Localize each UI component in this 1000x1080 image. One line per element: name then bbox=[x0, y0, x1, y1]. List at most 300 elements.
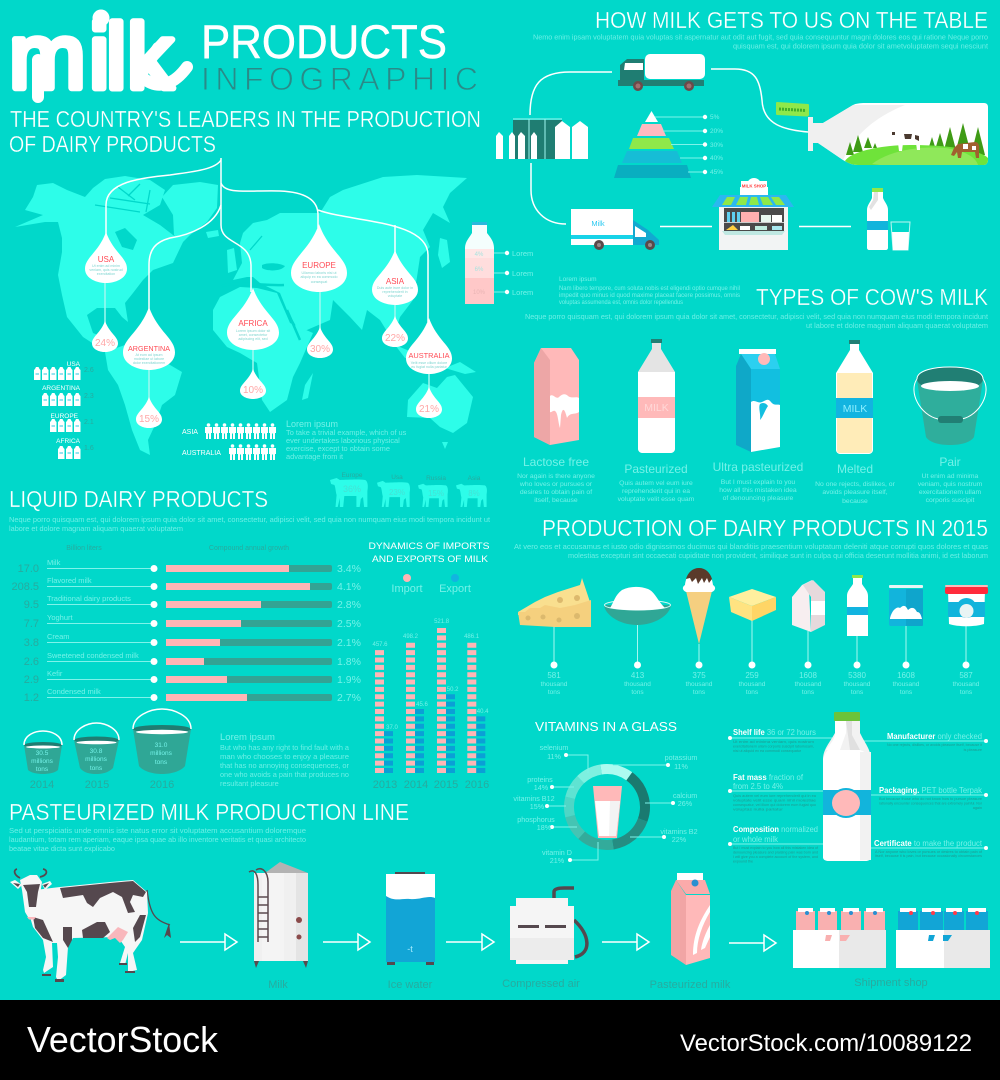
bottle callouts right bbox=[860, 732, 988, 858]
product: butter: thousand bbox=[739, 681, 766, 688]
milk type: pasteurized: voluptate velit esse quam bbox=[618, 496, 695, 503]
product: cottage cheese bowl bbox=[604, 587, 671, 696]
row: milk bbox=[18, 558, 361, 575]
drop: Asia share: 22% bbox=[385, 333, 405, 344]
stacked chart: imports and exports bbox=[368, 541, 490, 791]
milk type: lactose free: who loves or pursues or bbox=[519, 481, 593, 488]
callout: fat mass: consequatur, vel illum qui dolorem eum fugiat quo bbox=[733, 803, 816, 807]
vitamin callouts: phosphorus bbox=[517, 815, 555, 824]
text block: supply chain lorem ipsum bbox=[559, 276, 740, 306]
vitamin callouts bbox=[513, 743, 698, 865]
row: condensed milk bbox=[24, 687, 361, 704]
drop: Africa: Lorem ipsum dolor sit bbox=[236, 329, 270, 333]
callout: composition: denouncing pleasure and praising pain was born and bbox=[733, 850, 818, 854]
icon: glass of milk bbox=[593, 786, 622, 838]
product: cheese: tons bbox=[548, 689, 561, 696]
cow silhouettes chart: 36% bbox=[343, 484, 361, 494]
logo: milk lettering: milk bbox=[9, 6, 174, 108]
drop: Asia share bbox=[382, 316, 408, 347]
heading: country leaders: THE COUNTRY'S LEADERS IN THE PRODUCTION bbox=[10, 106, 481, 132]
drop: Europe: Ullamco laboris nisi ut bbox=[302, 271, 336, 275]
callout: composition: I will give you a complete account of the system, and bbox=[733, 855, 818, 859]
text block: liquid products lorem ipsum: man who chooses to enjoy a pleasure bbox=[220, 752, 349, 761]
icon: bottle with pasture scene bbox=[776, 102, 988, 165]
callout: shelf life: Ut enim ad minima veniam, quis nostrum bbox=[733, 740, 814, 744]
milk type: pasteurized: reprehenderit qui in ea bbox=[622, 488, 690, 495]
vitamin callouts: 15% bbox=[530, 802, 545, 811]
drop: Europe: aliquip ex ea commodo bbox=[301, 275, 337, 279]
supply chain connector lines bbox=[530, 69, 851, 226]
drop: Asia bbox=[372, 250, 418, 305]
title: products: PRODUCTS bbox=[201, 15, 447, 68]
pail: 2015: tons bbox=[90, 765, 103, 772]
callout: composition: Composition normalized bbox=[733, 825, 818, 834]
milk type: ultra pasteurized: Ultra pasteurized bbox=[713, 460, 803, 474]
callout: certificate: A Nor anyone who loves or pursues or desires to obtain pain of bbox=[875, 850, 983, 854]
milk type: pasteurized bbox=[618, 339, 695, 503]
product: yogurt cup: thousand bbox=[953, 681, 980, 688]
callout: certificate: Certificate to make the product bbox=[874, 839, 983, 848]
footer bar: VectorStock bbox=[27, 1019, 219, 1060]
text block: liquid products lorem ipsum: resultant pleasure bbox=[220, 779, 279, 788]
heading: pasteurized milk production line: beatae vitae dicta sunt explicabo bbox=[9, 844, 115, 853]
milk type: lactose free: itself, because bbox=[534, 497, 578, 504]
bar values: 45.6 bbox=[416, 702, 428, 708]
milk type: pail: Ut enim ad minima bbox=[922, 473, 979, 480]
vitamin callouts: 18% bbox=[537, 823, 552, 832]
icon: dairy factory bbox=[496, 119, 588, 159]
pail: 2015: 30.8 bbox=[90, 748, 103, 755]
milk type: melted: Melted bbox=[837, 462, 873, 476]
product: cheese: thousand bbox=[541, 681, 568, 688]
row: flavored milk bbox=[11, 576, 361, 593]
icon: ice water tank: -t bbox=[407, 944, 413, 954]
product: white carton: tons bbox=[802, 689, 815, 696]
product: blue cup: 1608 bbox=[897, 671, 915, 680]
milk type: pail: exercitationem ullam bbox=[919, 489, 981, 496]
heading: country leaders: OF DAIRY PRODUCTS bbox=[9, 131, 216, 157]
milk type: pail: veniam, quis nostrum bbox=[918, 481, 983, 488]
cow silhouettes chart: 23% bbox=[389, 488, 405, 497]
product: cottage cheese bowl: thousand bbox=[624, 681, 651, 688]
icon: ice water tank bbox=[386, 872, 435, 991]
milk type: lactose free: Nor again is there anyone bbox=[517, 473, 595, 480]
callout: fat mass: Fat mass fraction of bbox=[733, 773, 804, 782]
drop: Argentina: ARGENTINA bbox=[128, 344, 171, 353]
text block: supply chain lorem ipsum: Lorem ipsum bbox=[559, 276, 597, 283]
heading: types of cow's milk bbox=[525, 284, 989, 330]
bottle pictogram chart: ARGENTINA bbox=[42, 385, 81, 392]
milk type: pasteurized: Pasteurized bbox=[624, 462, 688, 476]
row: yoghurt bbox=[24, 613, 361, 630]
row: traditional dairy products: 2.8% bbox=[337, 599, 361, 611]
milk type: pasteurized: MILK bbox=[644, 402, 669, 414]
icon: milk shop: MILK SHOP bbox=[742, 184, 766, 188]
callout: shelf life: exercitationem ullam corporis suscipit laboriosam, bbox=[733, 744, 814, 748]
text block: liquid products lorem ipsum: But who has any right to find fault with a bbox=[220, 743, 350, 752]
callout: composition bbox=[728, 825, 823, 864]
product: blue cup: tons bbox=[900, 689, 913, 696]
drop: Australia: AUSTRALIA bbox=[408, 351, 450, 360]
sea channels bbox=[95, 184, 262, 250]
milk type: melted: avoids pleasure itself, bbox=[822, 489, 888, 496]
callout: packaging bbox=[871, 786, 988, 810]
pail: 2014: millions bbox=[31, 758, 54, 765]
bars bbox=[380, 626, 481, 773]
product: bottle: thousand bbox=[844, 681, 871, 688]
callout: packaging: again bbox=[973, 806, 982, 810]
arrow 4 bbox=[602, 934, 649, 950]
callout: packaging: But because those who do not know how to pursue pleasure bbox=[879, 797, 982, 801]
icon: air compressor bbox=[502, 888, 587, 990]
pyramid chart: 5% bbox=[710, 114, 720, 121]
milk type: pail bbox=[914, 367, 986, 504]
product: ice cream: thousand bbox=[686, 681, 713, 688]
bar values: 521.8 bbox=[434, 619, 450, 625]
heading: production of dairy products in 2015 bbox=[514, 515, 988, 560]
icon: silo bbox=[249, 862, 308, 991]
drop: Argentina: molestiae ut labore bbox=[134, 357, 164, 361]
product: cottage cheese bowl: 413 bbox=[631, 671, 645, 680]
icon: blue milk crate: Shipment shop bbox=[854, 977, 928, 989]
product: blue cup: thousand bbox=[893, 681, 920, 688]
row: yoghurt: Yoghurt bbox=[47, 613, 73, 622]
row: yoghurt: 7.7 bbox=[24, 618, 39, 630]
text block: map lorem ipsum bbox=[286, 419, 407, 461]
pail: 2014: tons bbox=[36, 766, 49, 773]
callout: certificate: itself, because it is pain, but because occasionally circumstances bbox=[875, 854, 982, 858]
drop: Africa: adipiscing elit, sed bbox=[238, 337, 268, 341]
row: traditional dairy products: 9.5 bbox=[24, 599, 39, 611]
icon: silo: Milk bbox=[268, 979, 288, 991]
milk type: ultra pasteurized: But I must explain to you bbox=[721, 479, 795, 486]
product: butter bbox=[729, 589, 776, 696]
subtitle: infographic: INFOGRAPHIC bbox=[201, 61, 478, 97]
bar values: 37.0 bbox=[386, 725, 398, 731]
cow silhouettes chart: 15% bbox=[428, 489, 444, 498]
icon: pink milk crate bbox=[793, 908, 886, 968]
drop: USA: exercitation bbox=[97, 272, 115, 276]
drop: Asia: Duis aute irure dolor in bbox=[377, 286, 413, 290]
bar chart: liquid dairy products bbox=[11, 545, 361, 704]
product: white carton bbox=[792, 580, 825, 696]
vitamin callouts: calcium bbox=[673, 791, 697, 800]
drop: Argentina share bbox=[136, 397, 162, 428]
bar values: 40.4 bbox=[477, 709, 489, 715]
pail: 2015: millions bbox=[85, 756, 108, 763]
vitamin callouts: 11% bbox=[547, 752, 562, 761]
drop: Africa: AFRICA bbox=[238, 319, 268, 328]
heading: pasteurized milk production line bbox=[9, 799, 409, 853]
row: cream bbox=[24, 632, 361, 649]
product: bottle bbox=[844, 575, 871, 696]
pyramid chart: 40% bbox=[710, 155, 723, 162]
bottle pictogram chart: USA bbox=[67, 361, 81, 368]
text block: liquid products lorem ipsum: Lorem ipsum bbox=[220, 732, 275, 743]
bar chart: liquid dairy products: Billion liters bbox=[66, 545, 102, 552]
labelled product bottle bbox=[823, 712, 871, 861]
donut chart: vitamins bbox=[569, 769, 645, 845]
milk bottle fat chart bbox=[465, 222, 533, 304]
heading: how milk gets to us: quisquam est, qui dolorem ipsum quia dolor sit ametvoluptatem sequi nesciunt bbox=[733, 42, 988, 50]
vitamin callouts: 26% bbox=[678, 799, 693, 808]
drop: Australia: Velit esse cillum dolore bbox=[411, 361, 447, 365]
heading: liquid dairy products: Neque porro quisquam est, qui dolorem ipsum quia dolor sit amet, consectetur, adipisci velit, sed quia non numquam eius modi tempora incidunt ut bbox=[9, 515, 490, 524]
row: sweetened condensed milk: 1.8% bbox=[337, 656, 361, 668]
inland seas bbox=[262, 263, 303, 286]
vitamin callouts: vitamins B2 bbox=[660, 827, 698, 836]
year labels: 2015 bbox=[434, 779, 458, 791]
bottle pictogram chart: 2.1 bbox=[84, 419, 94, 426]
milk type: ultra pasteurized: how all this mistaken idea bbox=[719, 487, 797, 494]
callout: fat mass: Quis autem vel eum iure reprehenderit qui in ea bbox=[733, 794, 817, 798]
drop: Australia share bbox=[416, 387, 442, 418]
pyramid chart: 30% bbox=[710, 142, 723, 149]
milk type: lactose free: desires to obtain pain of bbox=[520, 489, 592, 496]
callout: manufacturer: is pleasure bbox=[964, 748, 982, 752]
milk bottle fat chart: 6% bbox=[475, 267, 484, 273]
icon: delivery van: Milk bbox=[591, 219, 605, 228]
arrow 2 bbox=[323, 934, 370, 950]
year labels: 2014 bbox=[404, 779, 428, 791]
milk type: melted: MILK bbox=[843, 403, 867, 415]
callout: fat mass: voluptate velit esse quam nihil molestiae bbox=[733, 798, 816, 802]
pail: 2016: 31.0 bbox=[155, 742, 168, 749]
heading: vitamins in a glass: VITAMINS IN A GLASS bbox=[535, 720, 677, 734]
pail: 2016: tons bbox=[155, 759, 168, 766]
legend: Export bbox=[439, 583, 471, 595]
drop: USA share bbox=[92, 321, 118, 352]
icon: blue milk crate bbox=[854, 908, 990, 989]
row: kefir: 1.9% bbox=[337, 674, 361, 686]
bar chart: liquid dairy products: Compound annual growth bbox=[209, 545, 289, 552]
callout: fat mass: voluptas nulla pariatur bbox=[733, 808, 784, 812]
icon: milk tanker truck bbox=[618, 54, 705, 91]
row: flavored milk: 208.5 bbox=[11, 581, 39, 593]
milk bottle fat chart: 10% bbox=[473, 290, 486, 296]
product: white carton: 1608 bbox=[799, 671, 817, 680]
milk type: pail: corporis suscipit bbox=[926, 497, 974, 504]
text block: liquid products lorem ipsum bbox=[220, 732, 350, 788]
row: sweetened condensed milk: 2.6 bbox=[24, 656, 39, 668]
people pictogram chart bbox=[182, 423, 276, 460]
heading: liquid dairy products: LIQUID DAIRY PRODUCTS bbox=[9, 486, 268, 512]
callout: composition: or whole milk bbox=[733, 835, 779, 844]
row: kefir bbox=[24, 669, 361, 686]
bar values: 457.6 bbox=[372, 642, 388, 648]
icon: pasteurized milk carton: Pasteurized milk bbox=[650, 979, 731, 991]
drop: Argentina share: 15% bbox=[139, 414, 159, 425]
bar values: 486.1 bbox=[464, 634, 480, 640]
pail: 2016 bbox=[133, 709, 191, 791]
row: milk: 17.0 bbox=[18, 563, 39, 575]
icon: bottle and glass bbox=[867, 188, 910, 250]
heading: liquid dairy products: labore et dolore magnam aliquam quaerat voluptatem bbox=[9, 524, 183, 533]
heading: pasteurized milk production line: Sed ut perspiciatis unde omnis iste natus error sit voluptatem accusantium doloremque bbox=[9, 826, 306, 835]
drop: Europe share: 30% bbox=[310, 344, 330, 355]
callout: shelf life bbox=[728, 728, 835, 753]
milk bottle fat chart: Lorem bbox=[512, 269, 533, 278]
callout: shelf life: nisi ut aliquid ex ea commodi consequatur bbox=[733, 749, 802, 753]
callout: composition: expound the bbox=[733, 860, 753, 864]
title block bbox=[9, 6, 478, 108]
year labels: 2016 bbox=[465, 779, 489, 791]
chart title bbox=[368, 541, 490, 565]
milk bottle fat chart: Lorem bbox=[512, 249, 533, 258]
drop: Africa share bbox=[240, 369, 266, 399]
vitamin callouts: selenium bbox=[540, 743, 568, 752]
cow silhouettes chart: Europe bbox=[342, 472, 363, 479]
drop: Argentina: dolor exercitationem bbox=[133, 361, 165, 365]
callout: fat mass: from 2.5 to 4% bbox=[733, 782, 783, 791]
product: yogurt cup: 587 bbox=[959, 671, 973, 680]
vitamin callouts: potassium bbox=[665, 753, 697, 762]
bar values bbox=[372, 619, 489, 731]
vitamin callouts: 14% bbox=[534, 783, 549, 792]
text block: map lorem ipsum: ever undertakes laborious physical bbox=[286, 436, 400, 445]
drop: Argentina: At eum ad ipsum bbox=[136, 353, 162, 357]
milk type: ultra pasteurized bbox=[713, 349, 803, 502]
heading: pasteurized milk production line: PASTEURIZED MILK PRODUCTION LINE bbox=[9, 799, 409, 825]
heading: production of dairy products in 2015: At vero eos et accusamus et iusto odio dignissimos ducimus qui blanditiis praesentium voluptatum deleniti atque corrupti quos dolores et quas bbox=[514, 542, 988, 551]
product: blue cup bbox=[889, 585, 923, 696]
stems and dots for production bbox=[550, 620, 970, 668]
icon: delivery van bbox=[571, 209, 659, 250]
product: white carton: thousand bbox=[795, 681, 822, 688]
drop: Argentina bbox=[123, 307, 175, 370]
drop: Australia: eu fugiat nulla pariatur bbox=[411, 365, 448, 369]
icon: milk shop bbox=[712, 178, 794, 250]
row: condensed milk: 1.2 bbox=[24, 692, 39, 704]
connector lines bbox=[105, 158, 429, 400]
drop: Asia: ASIA bbox=[386, 277, 405, 286]
chart title: DYNAMICS OF IMPORTS bbox=[368, 541, 490, 552]
product: yogurt cup: tons bbox=[960, 689, 973, 696]
icon: ice water tank: Ice water bbox=[388, 979, 433, 991]
milk type: melted: No one rejects, dislikes, or bbox=[815, 481, 896, 488]
milk type: melted bbox=[815, 340, 896, 505]
drop: Australia bbox=[406, 318, 452, 374]
callout: composition: But I must explain to you how all this mistaken idea of bbox=[733, 846, 819, 850]
drop: Asia: voluptate bbox=[388, 294, 402, 298]
product: ice cream: 375 bbox=[692, 671, 706, 680]
world map bbox=[15, 175, 476, 455]
drop: Australia share: 21% bbox=[419, 404, 439, 415]
drop: Africa: amet, consectetur bbox=[239, 333, 268, 337]
arrow 5 bbox=[729, 935, 776, 951]
pyramid chart bbox=[614, 111, 723, 178]
pail: 2014: 30.5 bbox=[36, 750, 49, 757]
cow silhouettes chart bbox=[330, 472, 487, 507]
drop: Africa bbox=[227, 288, 279, 350]
vitamin callouts: vitamin D bbox=[542, 848, 572, 857]
chart title: AND EXPORTS OF MILK bbox=[372, 554, 489, 565]
heading: pasteurized milk production line: laudantium, totam rem aperiam, eaque ipsa quae ab illo inventore veritatis et quasi architecto bbox=[9, 835, 306, 844]
heading: liquid dairy products bbox=[9, 486, 490, 533]
bottle pictogram chart: 2.6 bbox=[84, 367, 94, 374]
legend bbox=[391, 574, 471, 595]
drop: Asia: reprehenderit in bbox=[382, 290, 408, 294]
drop: Europe share bbox=[307, 327, 333, 358]
row: condensed milk: 2.7% bbox=[337, 692, 361, 704]
drop: Europe: EUROPE bbox=[302, 261, 336, 270]
row: sweetened condensed milk: Sweetened condensed milk bbox=[47, 651, 139, 660]
product: ice cream bbox=[683, 568, 715, 696]
drop: Europe: consequat bbox=[311, 280, 327, 284]
callout: manufacturer: No one rejects, dislikes, or avoids pleasure itself, because it bbox=[887, 743, 983, 747]
icon: cow bbox=[10, 869, 171, 982]
year labels: 2013 bbox=[373, 779, 397, 791]
cow silhouettes chart: Asia bbox=[468, 475, 481, 482]
heading: types of cow's milk: ut labore et dolore magnam aliquam quaerat voluptatem bbox=[806, 321, 988, 330]
row: cream: Cream bbox=[47, 632, 70, 641]
vitamin callouts: 22% bbox=[672, 835, 687, 844]
row: kefir: Kefir bbox=[47, 669, 63, 678]
vitamin callouts: proteins bbox=[527, 775, 553, 784]
pyramid chart: 45% bbox=[710, 169, 723, 176]
product: cheese: 581 bbox=[547, 671, 561, 680]
row: condensed milk: Condensed milk bbox=[47, 687, 101, 696]
legend: Import bbox=[391, 583, 423, 595]
product: cheese bbox=[518, 578, 591, 696]
bottle pictogram chart: AFRICA bbox=[56, 438, 81, 445]
row: traditional dairy products: Traditional dairy products bbox=[47, 594, 131, 603]
drop: USA: USA bbox=[98, 255, 115, 264]
callout: fat mass bbox=[728, 773, 823, 812]
text block: supply chain lorem ipsum: Nam libero tempore, cum soluta nobis est eligendi optio cumque nihil bbox=[559, 285, 740, 292]
heading: how milk gets to us bbox=[533, 7, 988, 50]
bottle pictogram chart bbox=[34, 361, 94, 459]
text block: supply chain lorem ipsum: voluptas assumenda est, omnis dolor repellendus bbox=[559, 299, 683, 306]
milk type: lactose free bbox=[517, 348, 595, 504]
product: bottle: 5380 bbox=[848, 671, 866, 680]
product: yogurt cup bbox=[945, 585, 988, 696]
footer bar bbox=[0, 1000, 1000, 1080]
cow silhouettes chart: 8% bbox=[468, 489, 480, 498]
icon: air compressor: Compressed air bbox=[502, 978, 580, 990]
row: sweetened condensed milk bbox=[24, 651, 361, 668]
Hudson Bay bbox=[115, 228, 137, 250]
bottle callouts left bbox=[728, 728, 835, 864]
vitamin callouts: 21% bbox=[550, 856, 565, 865]
callout: manufacturer: Manufacturer only checked bbox=[887, 732, 982, 741]
heading: country leaders bbox=[9, 106, 481, 157]
bottle pictogram chart: EUROPE bbox=[51, 413, 79, 420]
pail: 2014 bbox=[24, 731, 62, 791]
row: cream: 2.1% bbox=[337, 637, 361, 649]
footer bar: VectorStock.com/10089122 bbox=[680, 1030, 972, 1057]
milk type: melted: because bbox=[842, 498, 868, 505]
people pictogram chart: ASIA bbox=[182, 429, 198, 436]
pyramid chart: 20% bbox=[710, 128, 723, 135]
product: butter: tons bbox=[746, 689, 759, 696]
product: butter: 259 bbox=[745, 671, 759, 680]
vitamin callouts: 11% bbox=[674, 762, 689, 771]
row: milk: 3.4% bbox=[337, 563, 361, 575]
milk type: ultra pasteurized: of denouncing pleasure bbox=[723, 495, 794, 502]
drop: USA: Ut enim ad minim bbox=[92, 264, 120, 268]
bar values: 50.2 bbox=[447, 687, 459, 693]
vitamin callouts: vitamins B12 bbox=[513, 794, 555, 803]
row: kefir: 2.9 bbox=[24, 674, 39, 686]
callout: certificate bbox=[871, 839, 988, 858]
row: yoghurt: 2.5% bbox=[337, 618, 361, 630]
milk type: pasteurized: Quis autem vel eum iure bbox=[619, 480, 693, 487]
arrow 3 bbox=[446, 934, 494, 950]
row: cream: 3.8 bbox=[24, 637, 39, 649]
drop: USA bbox=[85, 232, 127, 283]
callout: packaging: rationally encounter consequences that are extremely painful. Nor bbox=[879, 802, 983, 806]
